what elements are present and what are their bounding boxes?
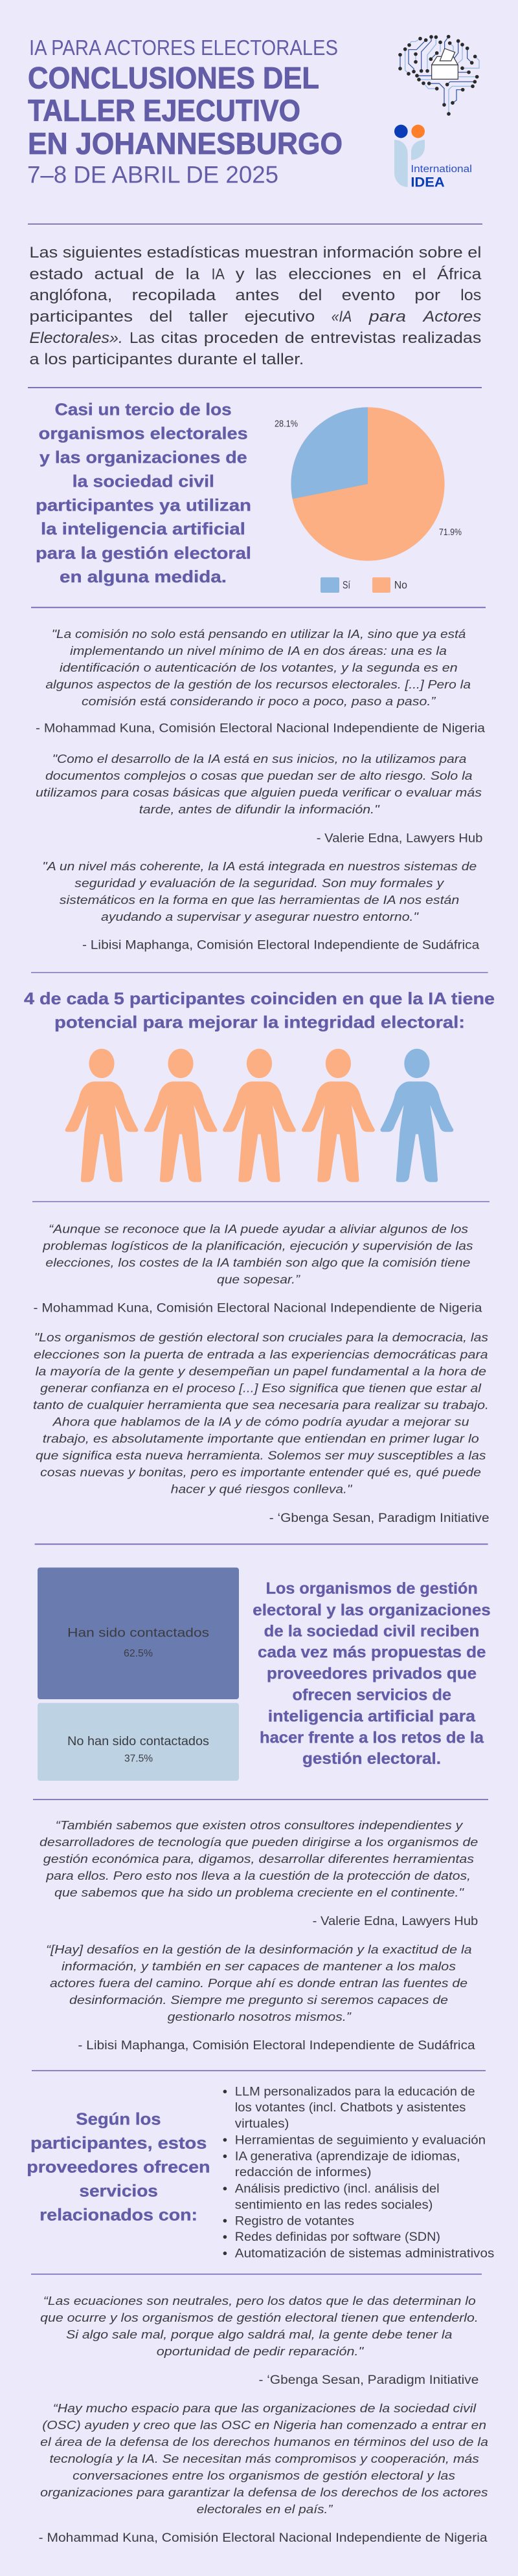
intro paragraph: IA <box>211 265 225 283</box>
title: TALLER EJECUTIVO <box>28 93 300 127</box>
quote: Gbenga Sesan: Ahora que hablamos de la IA y de cómo podría ayudar a mejorar su <box>52 1415 469 1429</box>
quote: Valerie Edna <box>36 752 482 845</box>
treemap: contacted vs not contacted: 37.5% <box>124 1754 153 1765</box>
intro paragraph: elecciones <box>288 265 371 283</box>
quote: Gbenga Sesan ecuaciones <box>40 2294 479 2387</box>
heading: los organismos de gestión: Los organismos de gestión <box>266 1580 478 1598</box>
quote: Mohammad Kuna OSC: “Hay mucho espacio para que las organizaciones de la sociedad civil <box>53 2401 477 2415</box>
intro paragraph: en <box>383 265 401 283</box>
quote: Libisi Maphanga desinformación <box>46 1943 475 2053</box>
intro paragraph: realizadas <box>402 329 481 347</box>
quote: Libisi Maphanga: seguridad y evaluación de la seguridad. Son muy formales y <box>74 876 445 890</box>
pie chart: 28.1% sí, 71.9% no: No <box>394 578 407 591</box>
heading: los organismos de gestión: proveedores privados que <box>267 1664 477 1682</box>
quote: Gbenga Sesan ecuaciones: oportunidad de pedir reparación." <box>157 2344 365 2358</box>
title <box>27 36 343 188</box>
quote: Gbenga Sesan: la mayoría de la gente y desempeñan un papel fundamental a la hora de <box>36 1364 486 1378</box>
quote: Libisi Maphanga desinformación: - Libisi Maphanga, Comisión Electoral Independiente de Sudáfrica <box>78 2039 475 2053</box>
intro paragraph: y <box>236 265 245 283</box>
intro paragraph: participantes <box>29 308 133 325</box>
intro paragraph: «IA <box>332 308 352 325</box>
title: EN JOHANNESBURGO <box>28 126 343 160</box>
logo: International IDEA: International <box>411 164 472 175</box>
intro paragraph: la <box>186 265 200 283</box>
quote: Mohammad Kuna costes: - Mohammad Kuna, Comisión Electoral Nacional Independiente de Nigeria <box>34 1302 482 1315</box>
heading: los organismos de gestión: inteligencia artificial para <box>268 1707 476 1725</box>
heading: los organismos de gestión: cada vez más propuestas de <box>258 1644 486 1662</box>
heading: 4 de cada 5 <box>24 989 495 1032</box>
quote: Valerie Edna: - Valerie Edna, Lawyers Hub <box>317 831 482 845</box>
bullet list: provider services: Redes definidas por software (SDN) <box>235 2230 440 2244</box>
quote: Libisi Maphanga desinformación: desinformación. Siempre me pregunto si seremos capaces de <box>69 1993 448 2007</box>
quote: Libisi Maphanga: "A un nivel más coherente, la IA está integrada en nuestros sistemas de <box>42 859 477 873</box>
quote: Mohammad Kuna: comisión está considerando ir poco a poco, paso a paso.” <box>82 694 436 708</box>
quote: Libisi Maphanga desinformación: “[Hay] desafíos en la gestión de la desinformación y la exactitud de la <box>46 1943 472 1956</box>
quote: Mohammad Kuna OSC: el área de la defensa de los derechos humanos en términos del uso de la <box>40 2435 488 2449</box>
quote: Mohammad Kuna OSC: - Mohammad Kuna, Comisión Electoral Nacional Independiente de Nigeria <box>39 2531 488 2545</box>
intro paragraph: proceden <box>204 329 278 347</box>
title: 7–8 DE ABRIL DE 2025 <box>27 162 278 188</box>
heading: casi un tercio: la sociedad civil <box>73 471 214 490</box>
quote: Valerie Edna: utilizamos para cosas básicas que alguien pueda verificar o evaluar más <box>36 786 482 799</box>
heading: según los participantes: relacionados con: <box>39 2205 197 2224</box>
heading: los organismos de gestión: electoral y las organizaciones <box>253 1601 491 1619</box>
bullet list: provider services: redacción de informes) <box>235 2166 372 2179</box>
quote: Mohammad Kuna: "La comisión no solo está pensando en utilizar la IA, sino que ya está <box>52 627 466 641</box>
logo: International IDEA <box>394 125 472 190</box>
title: IA PARA ACTORES ELECTORALES <box>29 36 338 60</box>
heading: 4 de cada 5: potencial para mejorar la integridad electoral: <box>54 1013 465 1032</box>
quote: Mohammad Kuna: - Mohammad Kuna, Comisión Electoral Nacional Independiente de Nigeria <box>36 721 485 735</box>
treemap: contacted vs not contacted: Han sido contactados <box>67 1627 209 1640</box>
logo: International IDEA: IDEA <box>411 174 445 190</box>
quote: Mohammad Kuna <box>36 627 485 735</box>
quote: Valerie Edna protección de datos: que sabemos que ha sido un problema creciente en el continente." <box>54 1886 465 1899</box>
intro paragraph: por <box>414 287 440 304</box>
quote: Valerie Edna protección de datos: - Valerie Edna, Lawyers Hub <box>313 1915 478 1928</box>
icon: brain circuit with ballot box <box>398 35 479 116</box>
quote: Valerie Edna: tarde, antes de difundir la información." <box>139 802 380 816</box>
heading: los organismos de gestión: de la sociedad civil reciben <box>264 1622 479 1640</box>
quote: Mohammad Kuna OSC <box>39 2401 488 2545</box>
quote: Mohammad Kuna OSC: (OSC) ayuden y creo que las OSC en Nigeria han comenzado a entrar en <box>42 2418 486 2432</box>
quote: Mohammad Kuna costes: que sopesar.” <box>217 1273 300 1286</box>
pictogram: 4 of 5 people <box>65 1049 453 1182</box>
quote: Libisi Maphanga desinformación: actores fuera del camino. Porque ahí es donde entran las fuentes de <box>50 1976 467 1990</box>
quote: Gbenga Sesan: hacer y qué riesgos conlleva." <box>171 1482 353 1496</box>
heading: los organismos de gestión: gestión electoral. <box>302 1750 441 1768</box>
bullet list: provider services: IA generativa (aprendizaje de idiomas, <box>235 2150 460 2163</box>
bullet list: provider services <box>223 2085 494 2260</box>
pie chart: 28.1% sí, 71.9% no <box>275 407 462 593</box>
quote: Mohammad Kuna OSC: organizaciones para garantizar la defensa de los derechos de los actores <box>40 2485 488 2499</box>
quote: Mohammad Kuna: implementando un nivel mínimo de IA en dos áreas: una es la <box>70 644 447 657</box>
quote: Gbenga Sesan: generar confianza en el proceso [...] Eso significa que tienen que estar al <box>40 1381 482 1394</box>
quote: Mohammad Kuna costes <box>34 1222 482 1315</box>
intro paragraph: Las siguientes estadísticas muestran información sobre el <box>29 244 481 261</box>
bullet list: provider services: virtuales) <box>235 2117 289 2131</box>
heading: casi un tercio: participantes ya utilizan <box>36 495 251 514</box>
quote: Gbenga Sesan ecuaciones: Si algo sale mal, porque algo saldrá mal, la gente debe tener la <box>66 2328 452 2341</box>
intro paragraph: el <box>412 265 426 283</box>
quote: Libisi Maphanga <box>42 859 480 952</box>
bullet list: provider services: los votantes (incl. Chatbots y asistentes <box>235 2101 466 2115</box>
intro paragraph: del <box>298 287 322 304</box>
intro paragraph: evento <box>342 287 395 304</box>
quote: Gbenga Sesan: "Los organismos de gestión electoral son cruciales para la democracia, las <box>34 1330 488 1344</box>
intro paragraph <box>29 244 482 368</box>
quote: Gbenga Sesan: elecciones son la puerta de entrada a las experiencias democráticas para <box>34 1347 488 1361</box>
quote: Libisi Maphanga desinformación: información, y también en ser capaces de mantener a los malos <box>62 1959 456 1973</box>
bullet list: provider services: LLM personalizados para la educación de <box>235 2085 475 2098</box>
quote: Libisi Maphanga: ayudando a supervisar y asegurar nuestro entorno." <box>101 910 420 923</box>
quote: Valerie Edna protección de datos <box>39 1818 478 1928</box>
treemap: contacted vs not contacted: No han sido contactados <box>67 1735 209 1748</box>
quote: Gbenga Sesan: que significa esta nueva herramienta. Solemos ser muy susceptibles a las <box>36 1448 486 1462</box>
heading: según los participantes <box>27 2109 210 2224</box>
pie chart: 28.1% sí, 71.9% no: 71.9% <box>439 527 462 538</box>
pie chart: 28.1% sí, 71.9% no: Sí <box>343 578 350 591</box>
quote: Gbenga Sesan: trabajo, es absolutamente importante que entiendan en primer lugar lo <box>43 1431 479 1445</box>
quote: Mohammad Kuna costes: problemas logísticos de la planificación, ejecución y supervisión de las <box>42 1238 473 1252</box>
intro paragraph: Actores <box>422 308 481 325</box>
quote: Valerie Edna protección de datos: desarrolladores de tecnología que pueden dirigirse a los organismos de <box>39 1835 478 1849</box>
heading: casi un tercio: y las organizaciones de <box>39 447 247 467</box>
treemap: contacted vs not contacted: 62.5% <box>124 1648 153 1659</box>
intro paragraph: Electorales». <box>29 329 123 347</box>
heading: casi un tercio: la inteligencia artificial <box>41 519 245 538</box>
quote: Gbenga Sesan: tanto de cualquier herramienta que sea necesaria para realizar su trabajo. <box>33 1398 489 1412</box>
intro paragraph: de <box>155 265 174 283</box>
heading: casi un tercio: Casi un tercio de los <box>55 400 232 419</box>
quote: Mohammad Kuna: algunos aspectos de la gestión de los recursos electorales. [...] Pero la <box>45 677 471 691</box>
heading: los organismos de gestión: hacer frente a los retos de la <box>260 1728 484 1746</box>
heading: según los participantes: participantes, estos <box>30 2133 207 2152</box>
intro paragraph: de <box>285 329 304 347</box>
quote: Valerie Edna: documentos complejos o cosas que puedan ser de alto riesgo. Solo la <box>45 769 473 782</box>
intro paragraph: citas <box>161 329 197 347</box>
quote: Gbenga Sesan ecuaciones: - ‘Gbenga Sesan, Paradigm Initiative <box>259 2373 479 2387</box>
quote: Gbenga Sesan ecuaciones: que ocurre y los organismos de gestión electoral tienen que entenderlo. <box>40 2311 479 2324</box>
intro paragraph: entrevistas <box>311 329 396 347</box>
heading: casi un tercio <box>36 400 251 586</box>
bullet list: provider services: Automatización de sistemas administrativos <box>235 2247 494 2260</box>
quote: Libisi Maphanga: - Libisi Maphanga, Comisión Electoral Independiente de Sudáfrica <box>82 939 480 952</box>
bullet list: provider services: Herramientas de seguimiento y evaluación <box>235 2133 486 2147</box>
intro paragraph: los <box>460 287 481 304</box>
quote: Libisi Maphanga: sistemáticos en la forma en que las herramientas de IA nos están <box>60 893 459 907</box>
heading: casi un tercio: para la gestión electoral <box>36 543 251 562</box>
intro paragraph: actual <box>94 265 144 283</box>
quote: Mohammad Kuna OSC: conversaciones entre los organismos de gestión electoral y las <box>73 2469 455 2482</box>
quote: Gbenga Sesan: cosas nuevas y bonitas, pero es importante entender qué es, qué puede <box>40 1465 481 1479</box>
quote: Mohammad Kuna: identificación o autenticación de los votantes, y la segunda es en <box>60 661 458 674</box>
intro paragraph: taller <box>189 308 228 325</box>
quote: Mohammad Kuna costes: “Aunque se reconoce que la IA puede ayudar a aliviar algunos de los <box>49 1222 468 1235</box>
heading: según los participantes: proveedores ofrecen <box>27 2157 210 2176</box>
heading: los organismos de gestión <box>253 1580 491 1768</box>
heading: casi un tercio: en alguna medida. <box>60 567 227 586</box>
intro paragraph: ejecutivo <box>245 308 315 325</box>
quote: Gbenga Sesan: - ‘Gbenga Sesan, Paradigm Initiative <box>269 1512 490 1525</box>
heading: según los participantes: Según los <box>76 2109 161 2128</box>
intro paragraph: recopilada <box>132 287 216 304</box>
quote: Mohammad Kuna costes: elecciones, los costes de la IA también son algo que la comisión tiene <box>45 1255 470 1270</box>
bullet list: provider services: Registro de votantes <box>235 2214 354 2228</box>
heading: según los participantes: servicios <box>79 2181 158 2200</box>
quote: Valerie Edna protección de datos: gestión económica para, digamos, desarrollar diferentes herramientas <box>43 1852 474 1866</box>
quote: Gbenga Sesan ecuaciones: “Las ecuaciones son neutrales, pero los datos que le das determinan lo <box>43 2294 476 2307</box>
intro paragraph: estado <box>29 265 83 283</box>
quote: Libisi Maphanga desinformación: gestionarlo nosotros mismos.” <box>168 2010 352 2023</box>
intro paragraph: para <box>368 308 406 325</box>
pie chart: 28.1% sí, 71.9% no: 28.1% <box>275 418 298 429</box>
title: CONCLUSIONES DEL <box>28 61 319 94</box>
treemap: contacted vs not contacted <box>38 1567 239 1781</box>
intro paragraph: las <box>255 265 276 283</box>
intro paragraph: anglófona, <box>29 287 112 304</box>
intro paragraph: antes <box>235 287 279 304</box>
heading: 4 de cada 5: 4 de cada 5 participantes coinciden en que la IA tiene <box>24 989 495 1008</box>
intro paragraph: África <box>437 265 482 283</box>
heading: los organismos de gestión: ofrecen servicios de <box>293 1686 451 1704</box>
intro paragraph: a los participantes durante el taller. <box>29 351 304 368</box>
bullet list: provider services: sentimiento en las redes sociales) <box>235 2198 433 2212</box>
heading: casi un tercio: organismos electorales <box>39 423 248 443</box>
intro paragraph: Las <box>130 329 155 347</box>
quote: Valerie Edna protección de datos: para ellos. Pero esto nos lleva a la cuestión de la protección de datos, <box>45 1869 471 1882</box>
intro paragraph: del <box>150 308 172 325</box>
quote: Gbenga Sesan <box>33 1330 490 1525</box>
quote: Valerie Edna protección de datos: “También sabemos que existen otros consultores independientes y <box>56 1818 464 1832</box>
quote: Mohammad Kuna OSC: electorales en el país.” <box>197 2502 333 2516</box>
bullet list: provider services: Análisis predictivo (incl. análisis del <box>235 2182 440 2196</box>
quote: Mohammad Kuna OSC: tecnología y la IA. Se necesitan más compromisos y cooperación, más <box>49 2452 479 2465</box>
quote: Valerie Edna: "Como el desarrollo de la IA está en sus inicios, no la utilizamos para <box>52 752 466 765</box>
